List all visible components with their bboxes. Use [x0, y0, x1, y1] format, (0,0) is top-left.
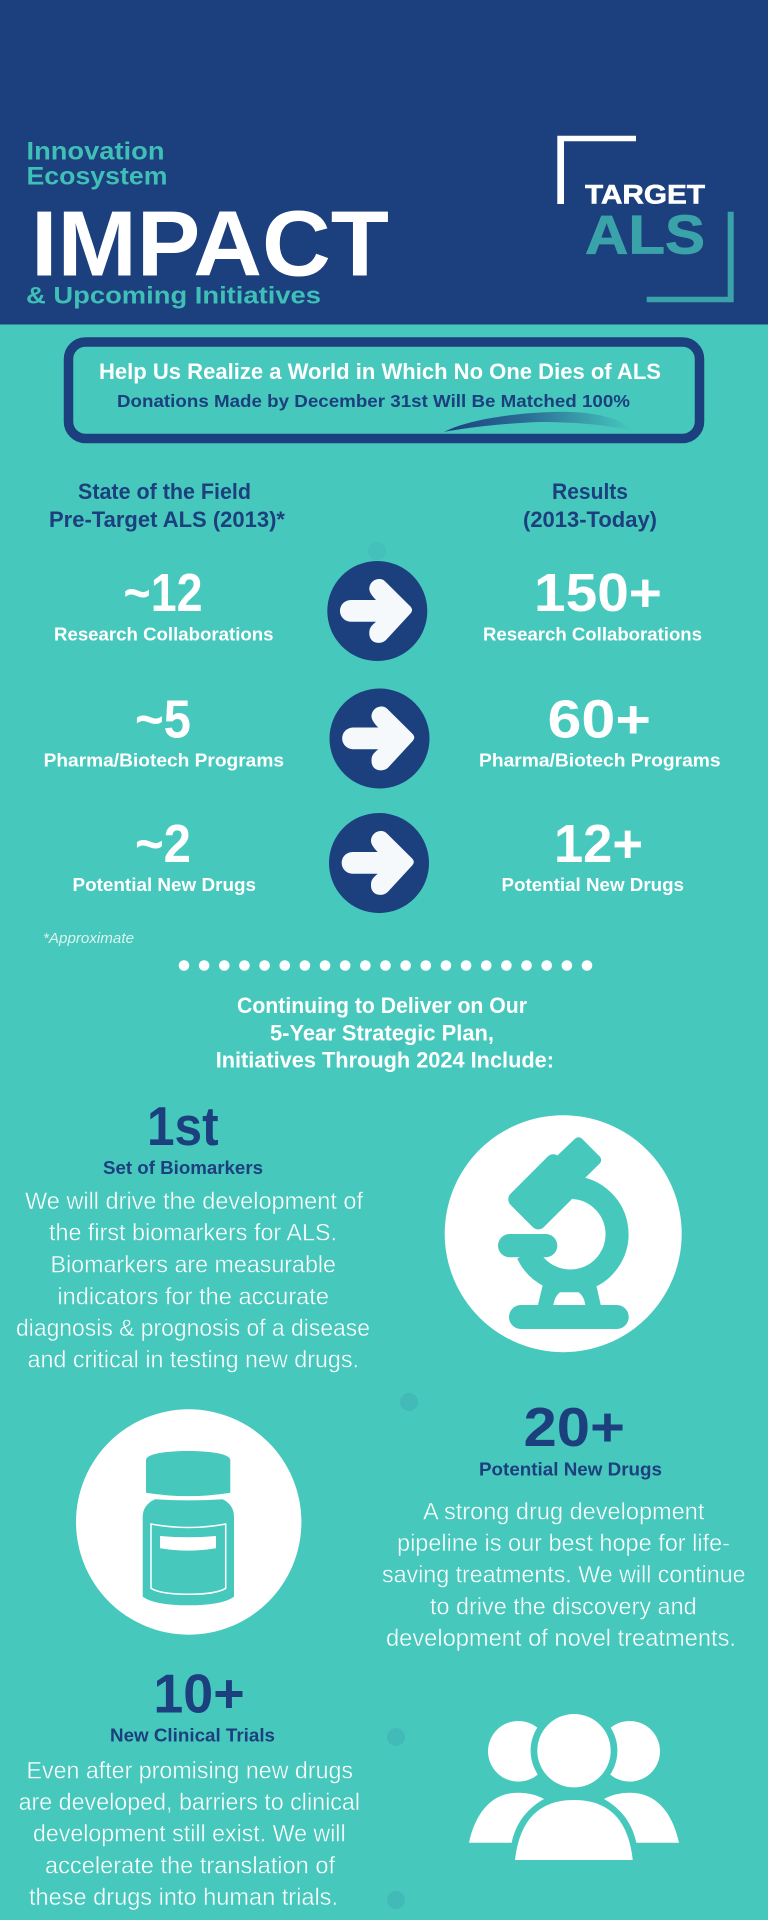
stat: research collaborations after: Research Collaborations [483, 624, 702, 644]
callout headline: Help Us Realize a World in Which No One Dies of ALS [99, 359, 661, 384]
faint decorative dots [368, 542, 418, 1909]
column heading: results [523, 479, 657, 532]
footnote: *Approximate [43, 930, 134, 947]
stat: pharma programs before [44, 690, 284, 770]
stat: potential drugs after: 12+ [554, 815, 643, 874]
biomarkers description: Biomarkers are measurable [50, 1251, 336, 1278]
biomarkers description: indicators for the accurate [57, 1283, 329, 1310]
label: new clinical trials: New Clinical Trials [110, 1725, 275, 1746]
stat: potential drugs before: Potential New Drugs [72, 874, 256, 895]
drugs description: to drive the discovery and [430, 1593, 697, 1620]
donation callout [68, 342, 700, 438]
drugs description: A strong drug development [423, 1498, 705, 1525]
stat: potential drugs before: ~2 [135, 815, 191, 874]
brush stroke [444, 412, 632, 432]
dotted divider [179, 960, 592, 971]
arrow 2 [330, 688, 430, 788]
stat: research collaborations after [483, 564, 702, 644]
stat: 20+: 20+ [524, 1396, 625, 1458]
arrow 1 [327, 561, 427, 661]
stat: 10+: 10+ [153, 1663, 245, 1725]
icon: microscope [445, 1115, 682, 1352]
initiative: biomarkers [16, 1095, 370, 1374]
biomarkers description [16, 1188, 370, 1374]
logo: Target ALS [557, 136, 734, 302]
label: potential new drugs: Potential New Drugs [479, 1459, 662, 1480]
biomarkers description: We will drive the development of [25, 1188, 363, 1215]
stat: pharma programs before: ~5 [135, 690, 191, 750]
icon: pill bottle [76, 1409, 301, 1635]
stat: research collaborations after: 150+ [534, 564, 662, 623]
section heading: strategic plan: 5-Year Strategic Plan, [270, 1020, 494, 1046]
arrow 3 [329, 813, 429, 913]
column heading: results: (2013-Today) [523, 507, 657, 532]
trials description [19, 1757, 360, 1911]
column heading: results: Results [552, 479, 628, 504]
section heading: strategic plan: Initiatives Through 2024 Include: [216, 1048, 554, 1072]
stat: research collaborations before: Research Collaborations [54, 624, 274, 644]
section heading: strategic plan [216, 993, 554, 1072]
header eyebrow: Innovation Ecosystem: Innovation [26, 137, 164, 165]
header eyebrow: Innovation Ecosystem [26, 137, 168, 190]
logo: Target ALS: ALS [585, 203, 705, 265]
callout matching note: Donations Made by December 31st Will Be Matched 100% [117, 391, 630, 411]
initiative: potential new drugs [382, 1396, 746, 1652]
stat: potential drugs after: Potential New Drugs [502, 874, 684, 895]
logo: Target ALS: TARGET [585, 179, 705, 209]
stat: pharma programs after: 60+ [548, 690, 651, 750]
column heading: state of the field: Pre-Target ALS (2013)* [49, 507, 285, 532]
stat: 1st: 1st [147, 1095, 219, 1157]
drugs description [382, 1498, 746, 1652]
header eyebrow: Innovation Ecosystem: Ecosystem [26, 162, 168, 190]
trials description: development still exist. We will [33, 1821, 346, 1848]
title: IMPACT: IMPACT [31, 192, 389, 296]
stat: pharma programs after [479, 690, 721, 770]
initiative: clinical trials [19, 1663, 360, 1911]
column heading: state of the field [49, 479, 285, 532]
section heading: strategic plan: Continuing to Deliver on Our [237, 993, 527, 1018]
label: set of biomarkers: Set of Biomarkers [103, 1157, 263, 1178]
column heading: state of the field: State of the Field [78, 479, 251, 504]
trials description: these drugs into human trials. [29, 1884, 338, 1911]
stat: potential drugs before [72, 815, 256, 895]
biomarkers description: diagnosis & prognosis of a disease [16, 1315, 370, 1342]
drugs description: saving treatments. We will continue [382, 1562, 746, 1589]
trials description: Even after promising new drugs [26, 1757, 353, 1784]
subtitle: upcoming initiatives: & Upcoming Initiatives [26, 282, 321, 309]
drugs description: pipeline is our best hope for life- [397, 1530, 730, 1557]
trials description: are developed, barriers to clinical [19, 1789, 360, 1816]
icon: group of people [469, 1707, 679, 1860]
stat: research collaborations before [54, 564, 274, 644]
stat: pharma programs after: Pharma/Biotech Programs [479, 750, 721, 770]
drugs description: development of novel treatments. [386, 1625, 736, 1652]
biomarkers description: and critical in testing new drugs. [28, 1347, 359, 1374]
stat: pharma programs before: Pharma/Biotech Programs [44, 750, 284, 770]
stat: research collaborations before: ~12 [124, 564, 202, 623]
trials description: accelerate the translation of [45, 1852, 335, 1879]
biomarkers description: the first biomarkers for ALS. [49, 1220, 337, 1247]
header band [0, 0, 768, 324]
stat: potential drugs after [502, 815, 684, 895]
